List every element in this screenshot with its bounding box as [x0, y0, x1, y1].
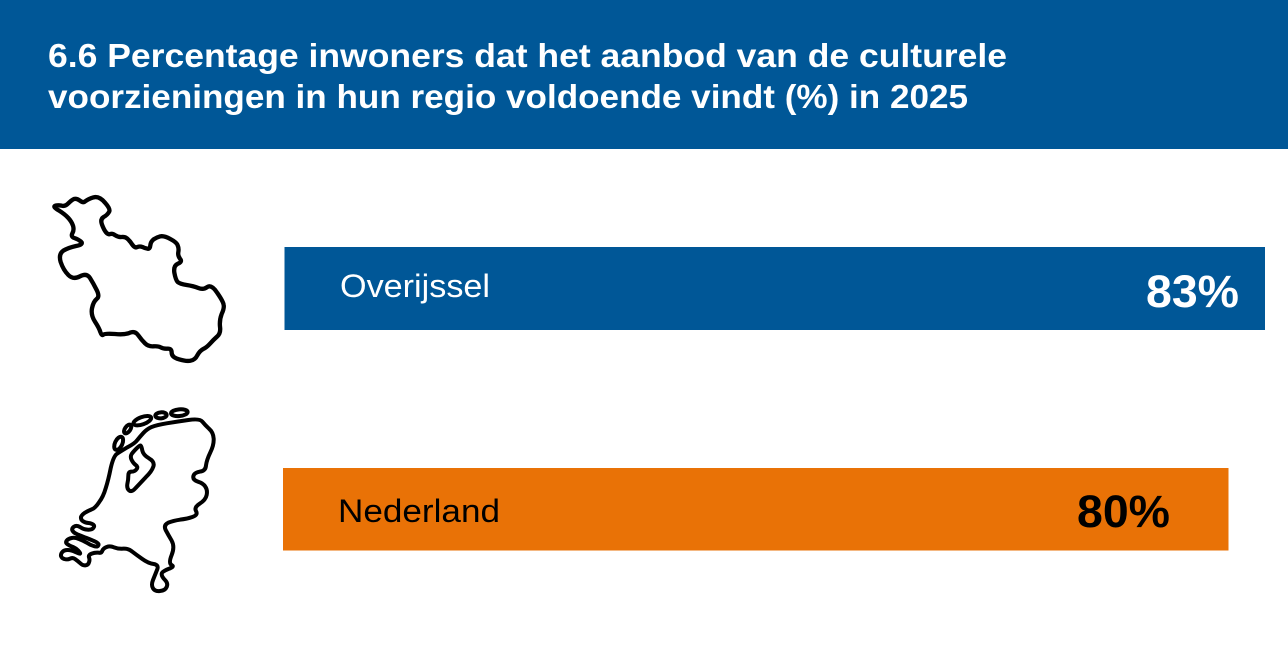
- bar: Nederland: [283, 468, 1228, 550]
- icon: map of Overijssel: [54, 197, 224, 361]
- title: voorzieningen in hun regio voldoende vindt (%) in 2025: [48, 78, 968, 115]
- label: Overijssel: Overijssel: [340, 268, 490, 304]
- icon: map of the Netherlands: [61, 409, 214, 591]
- label: Nederland: Nederland: [338, 493, 500, 529]
- title: 6.6 Percentage inwoners dat het aanbod van de culturele: [48, 37, 1007, 74]
- header band: [0, 0, 1288, 149]
- bar: Overijssel: [284, 247, 1265, 330]
- value: 80%: 80%: [1077, 486, 1170, 537]
- value: 83%: 83%: [1146, 266, 1239, 317]
- title: [48, 37, 1007, 115]
